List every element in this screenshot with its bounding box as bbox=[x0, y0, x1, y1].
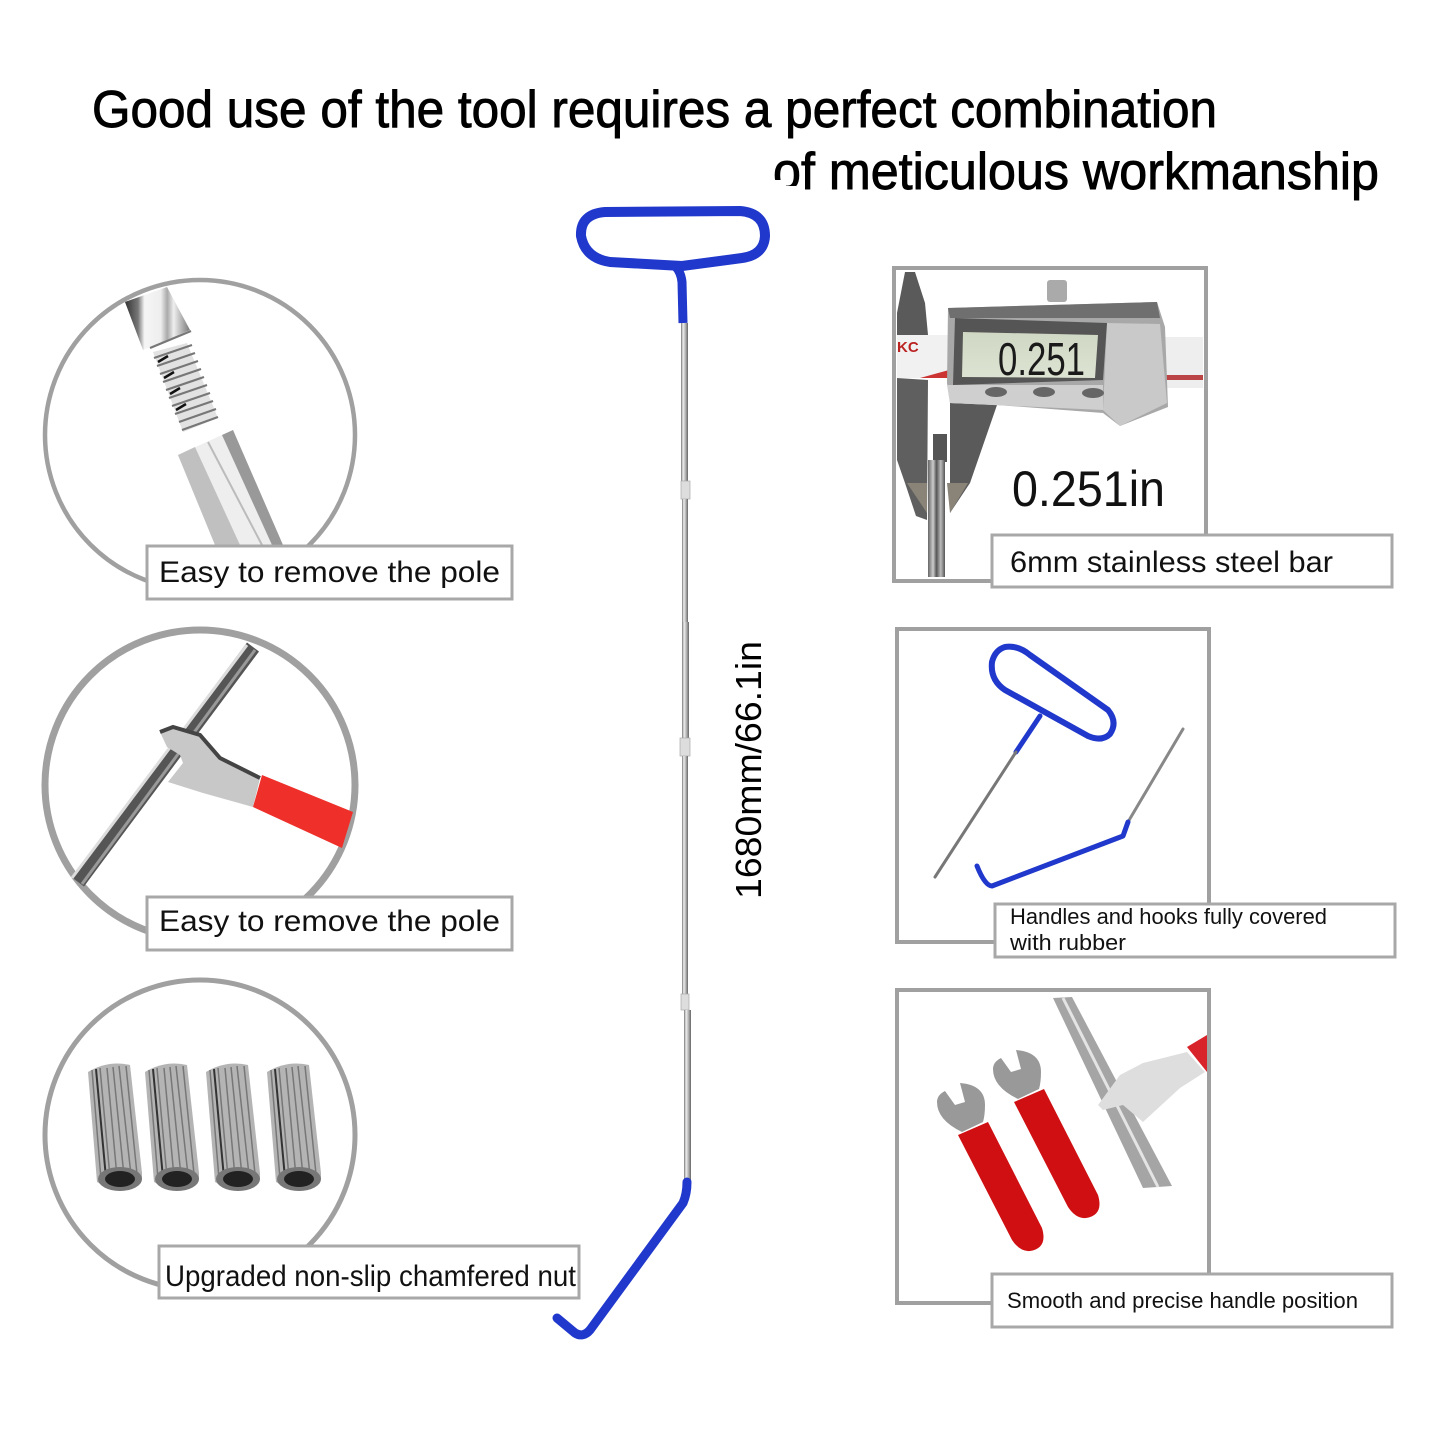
rod bbox=[933, 434, 947, 462]
title bbox=[92, 81, 1379, 201]
panel: removable pole thread bbox=[45, 280, 512, 599]
label: Easy to remove the pole bbox=[159, 905, 500, 938]
red wrench left bbox=[937, 1083, 1044, 1251]
label: with rubber bbox=[1009, 930, 1126, 955]
panel: wrench on pole bbox=[45, 630, 512, 950]
display bezel bbox=[953, 318, 1107, 385]
blue hook bbox=[557, 1182, 687, 1335]
red wrench grip bbox=[253, 775, 353, 848]
inner jaw bbox=[950, 403, 997, 513]
caliper body bbox=[947, 302, 1168, 426]
label: Upgraded non-slip chamfered nut bbox=[165, 1260, 577, 1293]
upper jaw bbox=[897, 272, 928, 335]
nut 2 bbox=[145, 1064, 199, 1191]
panel frame bbox=[897, 629, 1209, 942]
circle outline bbox=[45, 980, 355, 1290]
left scale bbox=[897, 335, 949, 378]
caliper photo: 0.251 bbox=[998, 333, 1085, 385]
tube bbox=[178, 430, 283, 545]
panel: rubber handles bbox=[897, 629, 1395, 957]
panel: caliper bbox=[894, 268, 1392, 587]
circle outline bbox=[45, 630, 355, 940]
nut 1 bbox=[88, 1064, 142, 1191]
pole with wrench bbox=[1053, 997, 1207, 1188]
buttons bbox=[985, 387, 1007, 397]
label bbox=[995, 904, 1395, 957]
nut 4 bbox=[267, 1064, 321, 1191]
panel frame bbox=[894, 268, 1206, 581]
LCD bbox=[962, 332, 1098, 378]
wrench bbox=[160, 727, 260, 807]
caliper photo: KC bbox=[897, 339, 919, 356]
caliper photo bbox=[897, 272, 1203, 577]
main tool: blue handle, steel pole and hook bbox=[557, 211, 765, 1335]
pole bbox=[72, 645, 255, 884]
label bbox=[159, 1246, 579, 1298]
wrench dark edge bbox=[160, 727, 260, 778]
right scale bbox=[1165, 337, 1203, 388]
silver end bbox=[1103, 323, 1167, 426]
threaded bolt bbox=[125, 287, 218, 432]
title: of meticulous workmanship bbox=[773, 143, 1379, 201]
label bbox=[147, 897, 512, 950]
panel: wrenches bbox=[897, 990, 1392, 1327]
hook bbox=[977, 729, 1183, 886]
blue T handle bbox=[581, 211, 765, 323]
T handle bbox=[935, 647, 1114, 877]
measurement: 0.251in bbox=[1012, 461, 1165, 517]
label bbox=[147, 546, 512, 599]
circle outline bbox=[45, 280, 355, 590]
label: Handles and hooks fully covered bbox=[1010, 904, 1327, 929]
length label: 1680mm/66.1in bbox=[728, 641, 769, 899]
panel frame bbox=[897, 990, 1209, 1303]
lower outer jaw bbox=[897, 378, 928, 520]
label: Smooth and precise handle position bbox=[1007, 1288, 1358, 1313]
title: Good use of the tool requires a perfect combination bbox=[92, 81, 1217, 139]
nut 3 bbox=[206, 1064, 260, 1191]
locking screw bbox=[1047, 280, 1067, 302]
label: 6mm stainless steel bar bbox=[1010, 546, 1333, 579]
label bbox=[992, 535, 1392, 587]
red wrench right bbox=[993, 1050, 1100, 1218]
steel pole bbox=[680, 323, 691, 1182]
panel: chamfered nuts bbox=[45, 980, 579, 1298]
label bbox=[992, 1274, 1392, 1327]
label: Easy to remove the pole bbox=[159, 556, 500, 589]
